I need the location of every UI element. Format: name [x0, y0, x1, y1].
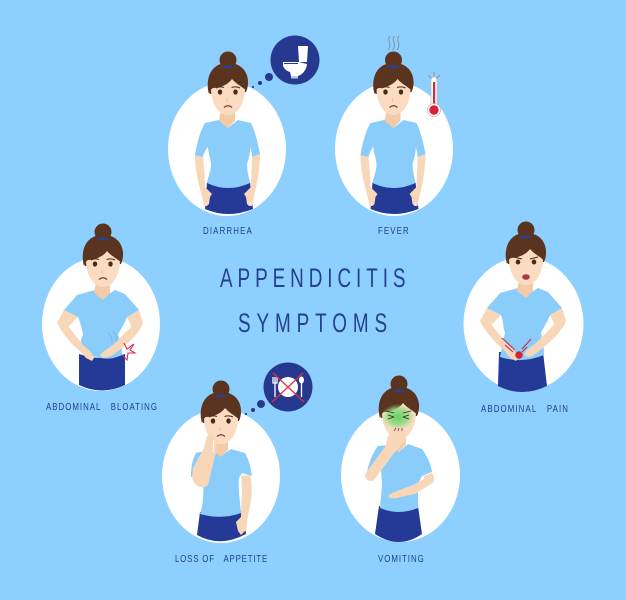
label: loss of appetite: LOSS OF APPETITE: [175, 553, 267, 564]
title: APPENDICITIS: [220, 263, 405, 293]
label: abdominal bloating: ABDOMINAL BLOATING: [46, 401, 157, 412]
icon: pain point with arrows: [502, 338, 531, 359]
icon: pain spark: [122, 343, 135, 360]
face: green nausea: [381, 404, 415, 430]
label: abdominal pain: ABDOMINAL PAIN: [481, 403, 568, 414]
panel: fever: [335, 36, 453, 236]
label: diarrhea: DIARRHEA: [203, 225, 252, 236]
icon: no food thought bubble: [245, 362, 312, 415]
icon: toilet thought bubble: [252, 36, 320, 88]
forearms and hands: [57, 323, 94, 361]
arm raised to chin: [192, 434, 217, 487]
label: fever: FEVER: [378, 225, 409, 236]
title: [220, 263, 406, 338]
arm raised to mouth: [365, 431, 406, 481]
icon: thermometer: [428, 72, 440, 116]
label: vomiting: VOMITING: [378, 553, 424, 564]
arms behind shirt: [57, 310, 143, 328]
panel: diarrhea: [168, 36, 320, 236]
panel: abdominal pain: [464, 222, 584, 414]
panel: loss of appetite: [162, 362, 312, 564]
icon: steam: [388, 36, 399, 50]
panel: vomiting: [341, 376, 460, 564]
face: pained expression: [514, 257, 538, 280]
title: SYMPTOMS: [238, 308, 387, 338]
panel: abdominal bloating: [42, 224, 160, 412]
